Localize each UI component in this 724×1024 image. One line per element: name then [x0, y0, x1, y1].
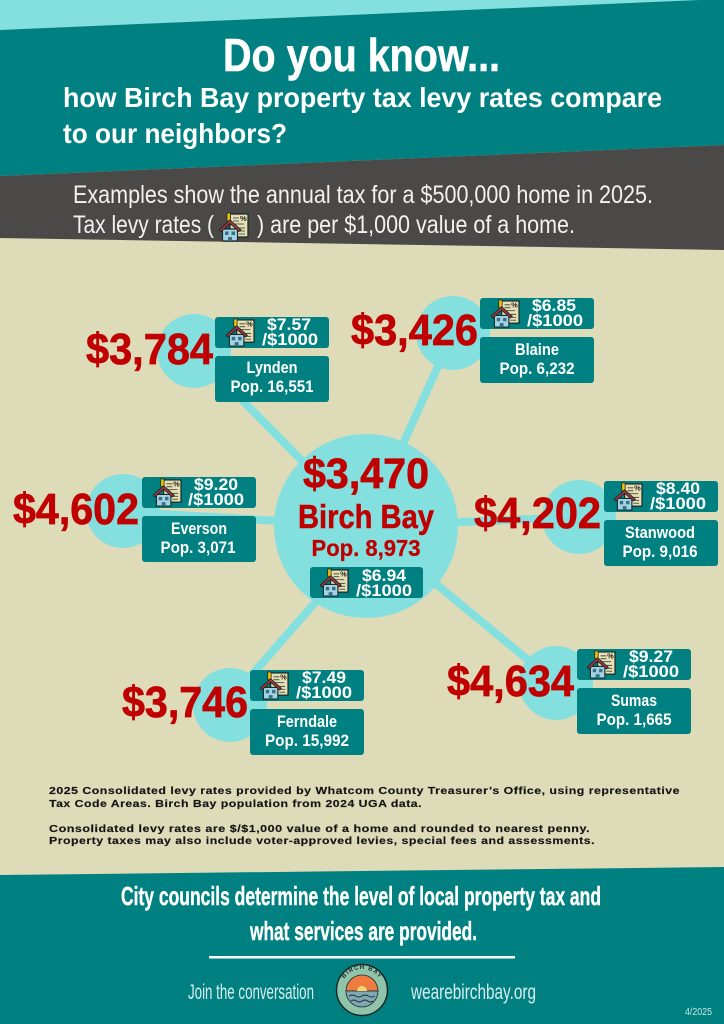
- panel: Blaine: $6.85: [532, 297, 576, 315]
- icon: tax levy legend: [219, 213, 248, 241]
- panel: Birch Bay: $3,470: [303, 450, 429, 498]
- panel: Everson: Everson: [171, 520, 227, 538]
- panel: Birch Bay: Pop. 8,973: [312, 535, 420, 561]
- panel: Blaine: Pop. 6,232: [500, 360, 574, 378]
- panel: Stanwood: $8.40: [656, 480, 700, 498]
- subtitle: how Birch Bay property tax levy rates compare: [63, 82, 662, 113]
- panel: Stanwood: [474, 480, 718, 566]
- panel: Birch Bay: /$1000: [356, 582, 412, 600]
- panel: Lynden: $3,784: [86, 325, 213, 374]
- subtitle: to our neighbors?: [63, 118, 287, 149]
- panel: Stanwood: Pop. 9,016: [622, 543, 698, 561]
- panel: Sumas: [447, 646, 691, 734]
- panel: Lynden: Pop. 16,551: [230, 378, 314, 396]
- panel: Sumas: $4,634: [447, 657, 574, 706]
- logo: Birch Bay seal: [336, 964, 388, 1016]
- subtitle: [63, 82, 662, 149]
- explanation text: ) are per $1,000 value of a home.: [257, 211, 575, 239]
- panel: Stanwood: $4,202: [474, 489, 601, 538]
- footnotes: Tax Code Areas. Birch Bay population from 2024 UGA data.: [49, 799, 422, 810]
- panel: Stanwood: Stanwood: [625, 524, 695, 542]
- footnotes: 2025 Consolidated levy rates provided by Whatcom County Treasurer’s Office, using representative: [49, 786, 680, 797]
- panel: Lynden: $7.57: [267, 316, 311, 334]
- join the conversation: Join the conversation: [188, 981, 314, 1004]
- date: 4/2025: [685, 1007, 712, 1018]
- panel: Lynden: [86, 314, 329, 402]
- panel: Sumas: $9.27: [629, 648, 673, 666]
- panel: Blaine: Blaine: [515, 341, 559, 359]
- header band: [0, 0, 724, 176]
- panel: Everson: $4,602: [13, 485, 139, 534]
- title: Do you know...: [223, 29, 500, 81]
- panel: Blaine: /$1000: [527, 312, 583, 330]
- panel: Birch Bay: $6.94: [362, 567, 407, 585]
- spokes: [126, 333, 579, 700]
- logo: Birch Bay seal: BIRCH BAY: [342, 965, 382, 978]
- closing message: what services are provided.: [249, 916, 477, 946]
- panel: Stanwood: /$1000: [650, 495, 706, 513]
- panel: Ferndale: [122, 668, 364, 755]
- panel: Everson: Pop. 3,071: [160, 539, 236, 557]
- panel: Ferndale: $3,746: [122, 678, 248, 727]
- website: wearebirchbay.org: [410, 981, 536, 1004]
- panel: Lynden: /$1000: [262, 331, 318, 349]
- panel: Sumas: /$1000: [623, 663, 679, 681]
- panel: Ferndale: Pop. 15,992: [265, 732, 349, 750]
- panel: Everson: [13, 474, 256, 562]
- explanation text: [73, 181, 653, 239]
- panel: Sumas: Pop. 1,665: [596, 711, 672, 729]
- closing message: [121, 881, 601, 946]
- panel: Sumas: Sumas: [611, 692, 657, 710]
- footnotes: Property taxes may also include voter-approved levies, special fees and assessments.: [49, 836, 595, 847]
- top light band: [0, 0, 724, 30]
- panel: Birch Bay: [274, 434, 458, 618]
- panel: Lynden: Lynden: [246, 359, 298, 377]
- panel: Ferndale: /$1000: [296, 684, 352, 702]
- panel: Everson: $9.20: [194, 476, 238, 494]
- footnotes: Consolidated levy rates are $/$1,000 value of a home and rounded to nearest penny.: [49, 824, 590, 835]
- footnotes: [49, 786, 680, 847]
- explanation text: Tax levy rates (: [73, 211, 215, 239]
- panel: Ferndale: $7.49: [302, 669, 346, 687]
- footer band: [0, 867, 724, 1024]
- panel: Everson: /$1000: [188, 491, 244, 509]
- subheader band: [0, 145, 724, 250]
- panel: Birch Bay: Birch Bay: [298, 498, 435, 535]
- panel: Blaine: $3,426: [351, 306, 478, 355]
- panel: Blaine: [351, 296, 594, 383]
- panel: Ferndale: Ferndale: [277, 713, 337, 731]
